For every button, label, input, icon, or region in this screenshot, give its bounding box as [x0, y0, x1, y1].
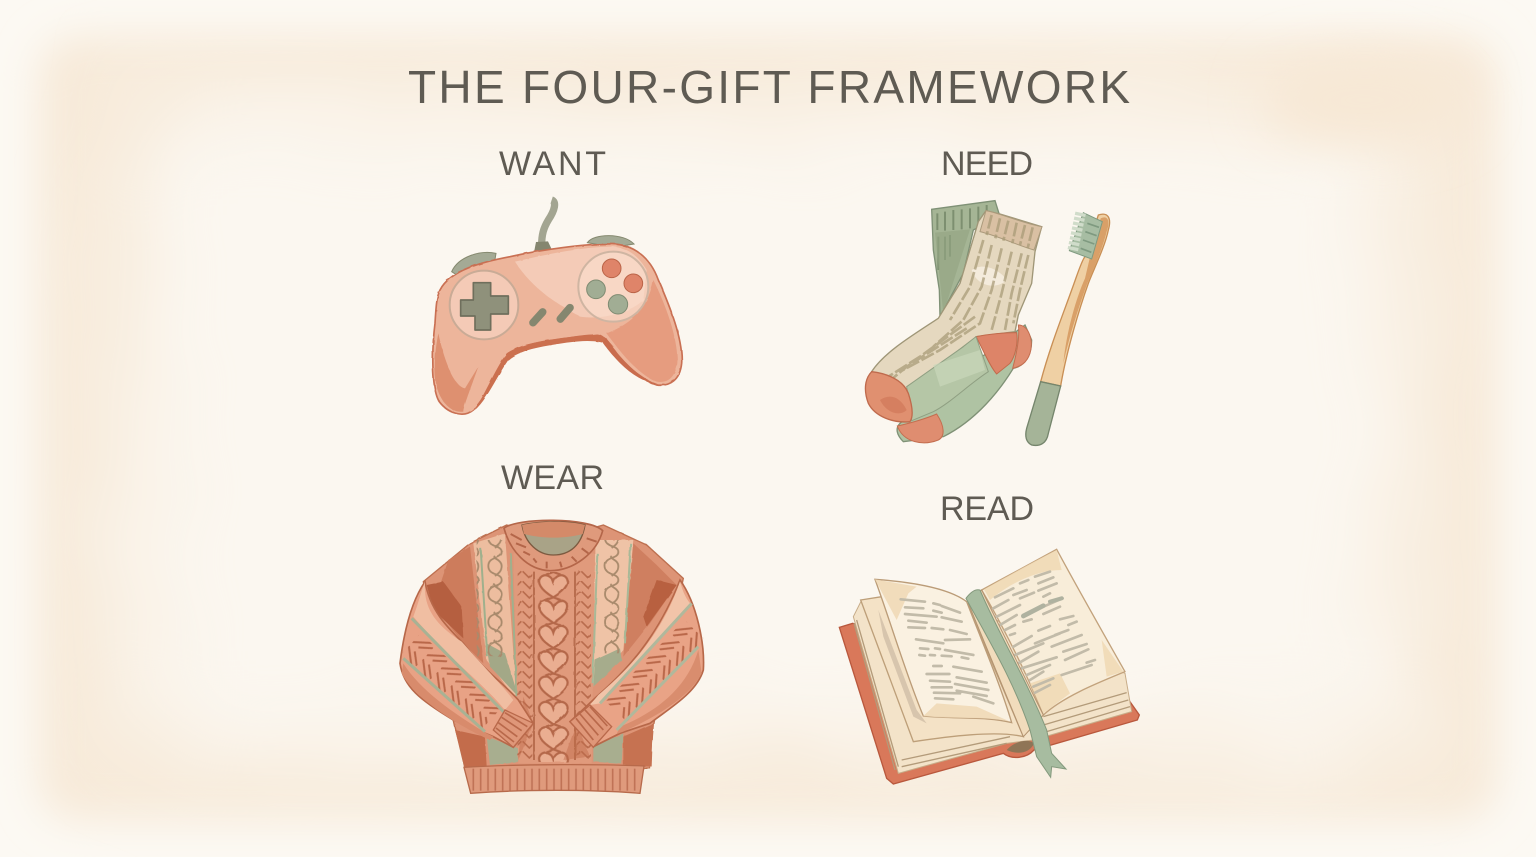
- heading: read: READ: [940, 490, 1034, 528]
- icon: toothbrush: [1026, 213, 1110, 445]
- panel: need: [865, 145, 1110, 445]
- icon: game controller: [433, 200, 682, 414]
- left sleeve: [400, 582, 533, 747]
- left page: [875, 579, 1012, 723]
- right page text lines: [993, 572, 1095, 693]
- book cover: [839, 623, 1139, 784]
- heading: need: NEED: [941, 145, 1033, 183]
- page block: [853, 600, 1132, 773]
- heading: want: WANT: [499, 145, 606, 183]
- hem: [464, 765, 644, 793]
- right sleeve: [570, 580, 706, 747]
- ribbon: [966, 590, 1066, 777]
- gutter: [968, 590, 1043, 737]
- panel: wear: [400, 459, 706, 793]
- heading: wear: WEAR: [501, 459, 604, 497]
- title: THE FOUR-GIFT FRAMEWORK: [408, 61, 1130, 113]
- icon: open book: [839, 549, 1139, 784]
- panel: want: [433, 145, 682, 414]
- icon: cable-knit sweater: [400, 520, 706, 793]
- left page text lines: [901, 599, 993, 703]
- icon: socks: [865, 201, 1042, 443]
- right page: [982, 549, 1125, 715]
- collar: [504, 520, 603, 571]
- panel: read: [839, 490, 1139, 784]
